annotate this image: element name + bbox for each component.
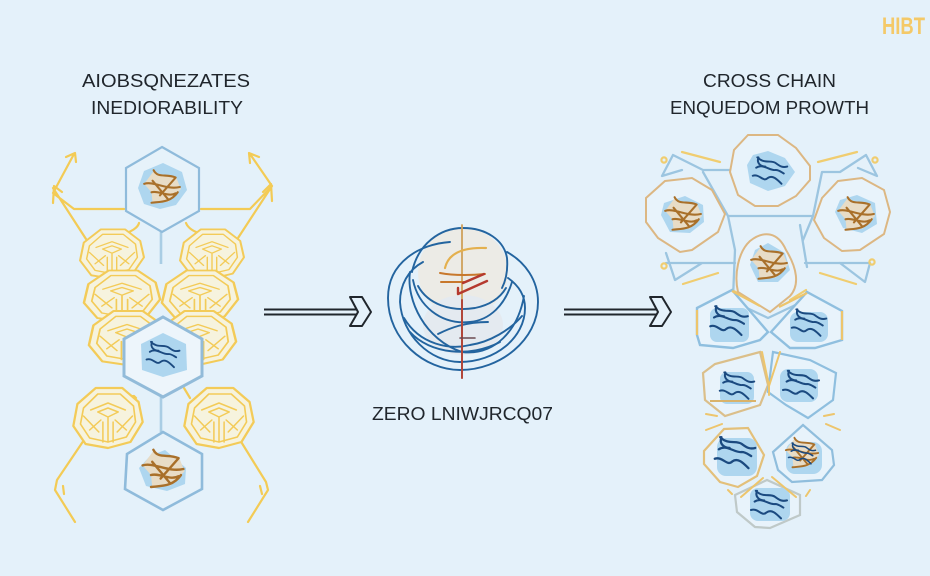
- right network: lower junction lines: [706, 352, 840, 497]
- center label: ZERO LNIWJRCQ07: [372, 404, 553, 424]
- right node: hexagon a: [697, 290, 768, 348]
- arrow: left to center: [264, 297, 371, 326]
- right node: top circle: [730, 135, 810, 206]
- right node: hexagon g: [735, 480, 800, 528]
- arrow: center to right: [564, 297, 671, 326]
- heading: right column: CROSS CHAIN: [703, 71, 836, 91]
- center: spiral stack: [388, 228, 538, 370]
- right node: hexagon d: [768, 352, 836, 418]
- right node: hexagon b: [771, 292, 842, 348]
- right node: left circle: [646, 178, 725, 252]
- yellow node cluster: [73, 229, 254, 448]
- hexagon node: middle: [124, 317, 202, 397]
- heading: right column: [670, 71, 869, 118]
- heading: left column: AIOBSQNEZATES: [82, 71, 250, 91]
- hexagon node: bottom: [125, 432, 202, 510]
- left network: stem connector: [160, 232, 162, 432]
- right node: hexagon f: [773, 425, 834, 482]
- right network: connector lines: [662, 155, 877, 318]
- right node: hexagon e: [704, 428, 764, 487]
- right node: hexagon c: [703, 352, 768, 416]
- left network: yellow connectors: [53, 153, 272, 522]
- hexagon node: top: [126, 147, 199, 232]
- right network: yellow accents: [661, 152, 878, 300]
- heading: left column: INEDIORABILITY: [91, 98, 243, 118]
- heading: left column: [82, 71, 250, 118]
- right node: center circle: [736, 234, 796, 312]
- center: vertical and accent lines: [440, 225, 487, 378]
- heading: right column: ENQUEDOM PROWTH: [670, 98, 869, 118]
- right node: right circle: [814, 178, 890, 251]
